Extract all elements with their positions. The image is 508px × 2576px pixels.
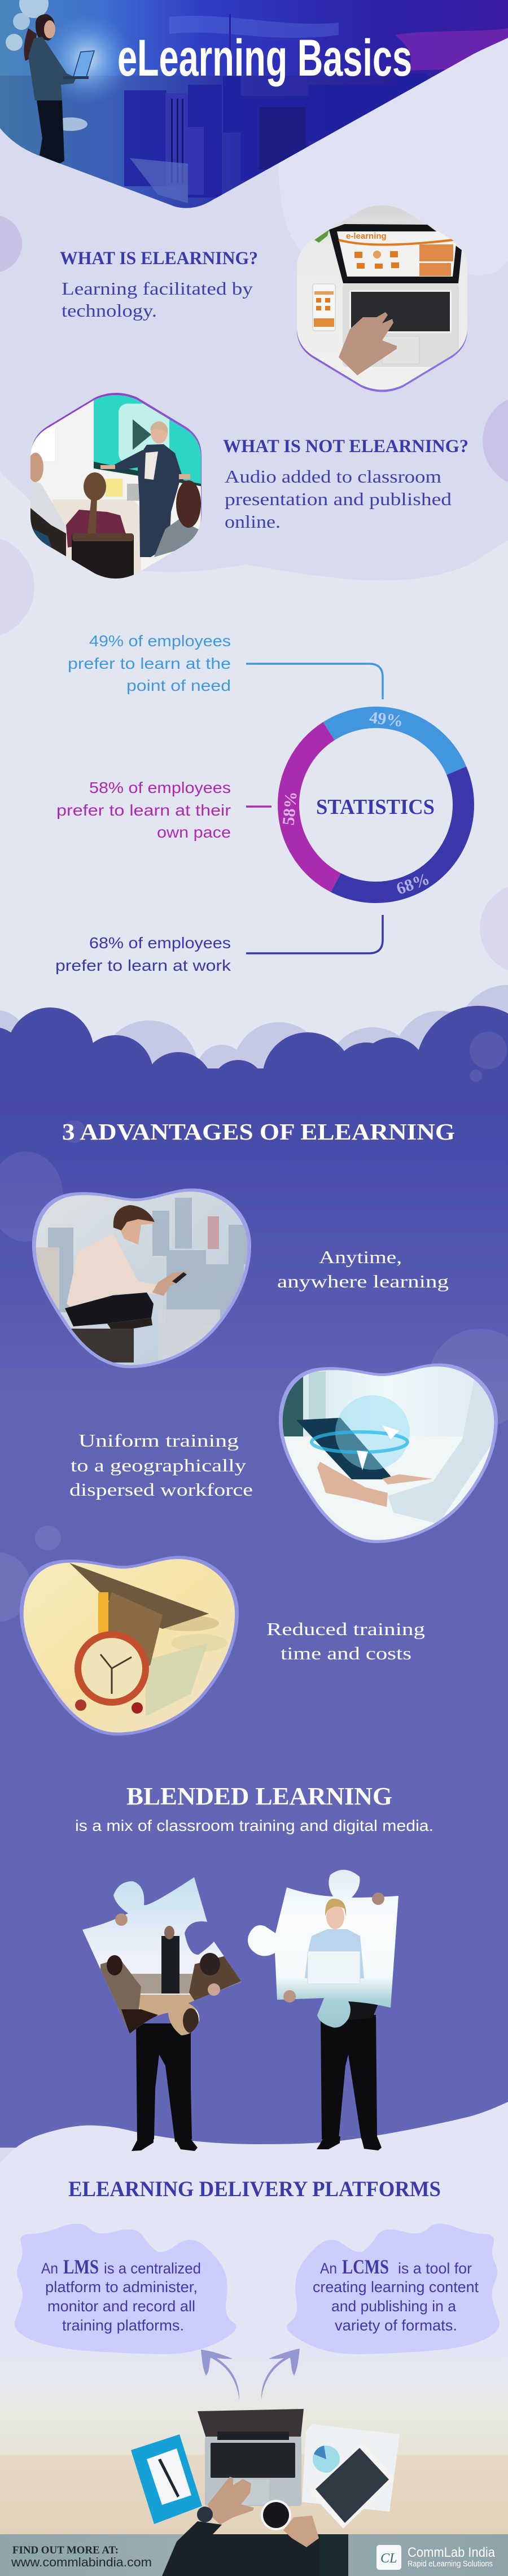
panel: what is eLearning <box>60 248 258 321</box>
icon: watch <box>197 2507 213 2522</box>
photo: laptop with elearning screen <box>294 200 471 392</box>
stat: 49% of employees: prefer to learn at the <box>68 655 231 672</box>
logo: CommLab India: CL <box>380 2551 397 2566</box>
clouds: light layer <box>0 985 508 1119</box>
arrow: to LMS <box>201 2350 239 2400</box>
text: uniform training: dispersed workforce <box>69 1479 253 1500</box>
text: reduced training <box>266 1619 425 1663</box>
text: LMS description: LMS <box>63 2255 99 2278</box>
text: uniform training: to a geographically <box>71 1455 246 1475</box>
lighter lower background <box>0 472 508 1072</box>
text: LCMS description: LCMS <box>342 2255 389 2278</box>
connector: 58% <box>246 805 271 808</box>
footer: find out more: www.commlabindia.com <box>11 2555 152 2569</box>
heading: what is eLearning: WHAT IS ELEARNING? <box>60 248 258 269</box>
icon: papers and pie chart <box>302 2424 400 2512</box>
photo blob: man with phone <box>28 1185 254 1372</box>
label: 68%: 68% <box>394 869 432 899</box>
decorative circle lower left <box>0 536 34 638</box>
decorative circle right <box>483 396 508 486</box>
text: uniform training: Uniform training <box>78 1430 239 1451</box>
heading: 3 advantages: 3 ADVANTAGES OF ELEARNING <box>62 1119 455 1145</box>
figure: person holding classroom puzzle piece <box>79 1877 248 2151</box>
text: definition line 1: Learning facilitated by <box>62 278 253 299</box>
text: uniform training <box>69 1430 253 1500</box>
stat: 49% of employees: 49% of employees <box>89 632 231 650</box>
stat: 68% of employees: 68% of employees <box>89 934 231 952</box>
text: LMS description: is a centralized <box>104 2260 201 2277</box>
decorative circle lower right <box>480 883 508 974</box>
photo: classroom presentation <box>28 392 203 584</box>
icon: tablet <box>309 2442 395 2529</box>
stat: 68% of employees <box>55 934 231 974</box>
wood desk background <box>0 2348 508 2537</box>
cloud: LMS <box>15 2224 237 2354</box>
text: LMS description: monitor and record all <box>47 2298 195 2315</box>
figure: person holding digital puzzle piece <box>248 1870 398 2150</box>
text: LMS description <box>41 2255 201 2334</box>
photo blob: clock and graduation cap <box>16 1553 242 1739</box>
text: LCMS description: variety of formats. <box>335 2317 457 2334</box>
icon: laptop <box>198 2409 304 2506</box>
footer: find out more <box>11 2544 152 2569</box>
text: LCMS description: creating learning content <box>313 2279 479 2295</box>
text: LMS description: platform to administer, <box>45 2279 198 2295</box>
icon: hand on trackpad <box>208 2477 254 2525</box>
text: LCMS description: is a tool for <box>398 2260 472 2277</box>
stat: 58% of employees: 58% of employees <box>89 779 231 796</box>
decorative translucent circles <box>0 1032 508 1622</box>
heading: delivery platforms: ELEARNING DELIVERY PLATFORMS <box>68 2177 441 2201</box>
text: reduced training: time and costs <box>281 1643 411 1663</box>
text: definition line 2: technology. <box>62 300 157 321</box>
icon: coffee mug <box>261 2500 291 2530</box>
footer: find out more: FIND OUT MORE AT: <box>12 2544 119 2556</box>
photo: desk with laptop, notebook, tablet and coffee <box>131 2409 400 2576</box>
text: anytime anywhere <box>277 1247 449 1291</box>
label: 58%: 58% <box>279 791 301 826</box>
stat: 49% of employees <box>68 632 231 694</box>
stat: 49% of employees: point of need <box>126 677 231 694</box>
arrow: to LCMS <box>261 2349 300 2400</box>
text: LCMS description: and publishing in a <box>331 2298 457 2315</box>
stat: 58% of employees: own pace <box>157 823 231 841</box>
panel: light bottom section <box>0 2102 508 2576</box>
photo: laptop with elearning screen: e-learning <box>346 231 387 241</box>
stat: 68% of employees: prefer to learn at work <box>55 957 231 974</box>
logo: CommLab India <box>376 2545 496 2570</box>
text: anytime anywhere: Anytime, <box>319 1247 402 1267</box>
text: blended learning definition: is a mix of classroom training and digital media. <box>75 1817 433 1834</box>
label: 49%: 49% <box>368 708 404 731</box>
heading: blended learning: BLENDED LEARNING <box>126 1782 392 1810</box>
text: LCMS description: An <box>320 2260 337 2277</box>
connector: 49% <box>246 664 383 699</box>
icon: hand with mug <box>283 2516 319 2547</box>
text: anytime anywhere: anywhere learning <box>277 1271 449 1291</box>
footer floor strip <box>0 2534 508 2576</box>
text: reduced training: Reduced training <box>266 1619 425 1639</box>
logo: CommLab India: CommLab India <box>408 2545 496 2560</box>
connector: 68% <box>246 915 383 953</box>
text: line 2: presentation and published <box>225 489 452 509</box>
logo: CommLab India: Rapid eLearning Solutions <box>408 2559 493 2569</box>
panel: what is not eLearning <box>223 436 468 532</box>
icon: chair back <box>320 2534 348 2576</box>
text: line 1: Audio added to classroom <box>225 466 441 487</box>
icon: notebook <box>131 2434 202 2524</box>
heading: what is not eLearning: WHAT IS NOT ELEARNING? <box>223 436 468 457</box>
background blob behind first photo <box>279 34 508 275</box>
panel: purple section background <box>0 1075 508 2148</box>
stat: 58% of employees <box>56 779 231 841</box>
text: LCMS description <box>313 2255 479 2334</box>
icon: woman with laptop <box>24 14 94 164</box>
text: LMS description: training platforms. <box>62 2317 184 2334</box>
decorative circle left <box>0 215 22 273</box>
stat: 58% of employees: prefer to learn at their <box>56 801 231 819</box>
title: statistics: STATISTICS <box>316 795 435 819</box>
donut chart: statistics <box>279 708 463 899</box>
photo blob: tablet and globe <box>275 1360 501 1547</box>
header banner <box>0 0 508 214</box>
cloud: LCMS <box>287 2224 500 2354</box>
clouds: dark layer <box>0 1006 508 1130</box>
icon: person sweater <box>162 2521 339 2576</box>
text: line 3: online. <box>225 511 281 532</box>
text: LMS description: An <box>41 2260 58 2277</box>
